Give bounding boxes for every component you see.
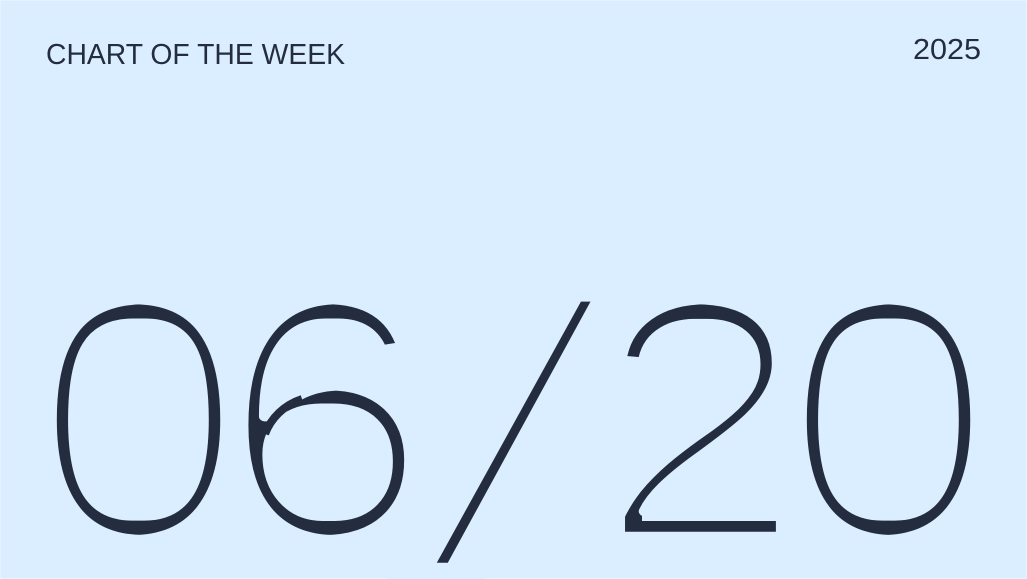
heading: chart of the week: CHART OF THE WEEK (46, 39, 346, 71)
large date 06/20 (30, 225, 997, 579)
year label: 2025 (913, 34, 981, 66)
